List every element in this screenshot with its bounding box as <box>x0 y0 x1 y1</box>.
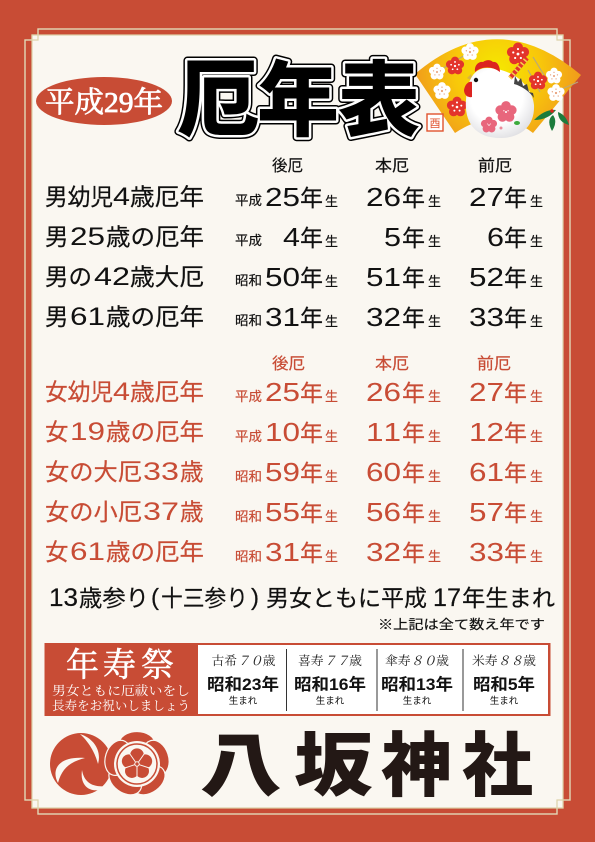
women: row 61 year olds: 生 <box>428 549 441 564</box>
women: row 33 year olds: 年 <box>402 460 425 486</box>
women: row 19 year olds: 年 <box>402 420 425 446</box>
women: row 37 year olds: 女の小厄 <box>45 499 142 525</box>
men: row 4 year olds: 平成 <box>235 193 262 208</box>
women: row 61 year olds: 年 <box>300 540 323 566</box>
thirteen year pilgrimage note: ) <box>251 584 259 610</box>
men: row 61 year olds <box>45 302 543 332</box>
thirteen year pilgrimage note: 十三参り <box>161 585 248 611</box>
women: row 61 year olds: 32 <box>366 537 401 567</box>
women: row 19 year olds: 歳の厄年 <box>106 419 204 445</box>
festival message <box>52 683 190 713</box>
shrine name: 神 <box>381 710 452 811</box>
men: row 61 year olds: 年 <box>300 305 323 331</box>
men: row 25 year olds: 生 <box>325 234 338 249</box>
title: 表 <box>338 34 420 153</box>
women: row 61 year olds: 31 <box>265 537 300 567</box>
men: row 61 year olds: 生 <box>428 314 441 329</box>
title: 年 <box>257 34 339 153</box>
men: column headings: 本厄 <box>375 157 409 175</box>
men: row 4 year olds: 年 <box>504 185 527 211</box>
women: row 19 year olds: 11 <box>366 417 401 447</box>
men: row 4 year olds: 27 <box>469 182 504 212</box>
men: row 4 year olds: 生 <box>428 194 441 209</box>
women: row 4 year olds: 女幼児 <box>45 379 113 405</box>
men: row 61 year olds: 年 <box>402 305 425 331</box>
men: row 25 year olds: 年 <box>300 225 323 251</box>
women: row 19 year olds: 年 <box>300 420 323 446</box>
women: row 33 year olds: 歳 <box>180 459 204 485</box>
festival message: 長寿をお祝いしましょう <box>52 698 190 713</box>
women: row 61 year olds: 生 <box>325 549 338 564</box>
women: row 33 year olds: 年 <box>300 460 323 486</box>
women: row 19 year olds: 年 <box>504 420 527 446</box>
men: row 4 year olds: 年 <box>402 185 425 211</box>
men: row 42 year olds: 生 <box>325 274 338 289</box>
women: row 19 year olds: 平成 <box>235 429 262 444</box>
women: row 33 year olds: 60 <box>366 457 401 487</box>
festival heading <box>66 647 174 684</box>
panel: longevity festival <box>44 643 550 716</box>
women: row 61 year olds: 61 <box>70 538 105 566</box>
festival heading: 年 <box>66 647 99 684</box>
plum blossoms <box>429 43 565 116</box>
women: row 61 year olds: 33 <box>469 537 504 567</box>
women: row 19 year olds: 生 <box>530 429 543 444</box>
women: row 19 year olds: 生 <box>325 429 338 444</box>
men: row 42 year olds <box>45 262 543 292</box>
women: row 4 year olds: 26 <box>366 377 401 407</box>
cell: kiju 77: 昭和16年 <box>294 674 366 694</box>
women: row 33 year olds: 生 <box>428 469 441 484</box>
women: row 4 year olds: 25 <box>265 377 300 407</box>
thirteen year pilgrimage note: 年生まれ <box>462 585 555 611</box>
women: row 37 year olds: 37 <box>143 498 179 526</box>
festival heading: 寿 <box>103 647 136 684</box>
men: row 4 year olds: 生 <box>325 194 338 209</box>
men: row 25 year olds: 生 <box>428 234 441 249</box>
men: row 25 year olds: 6 <box>487 222 504 252</box>
illustration: fan and rooster <box>415 39 581 138</box>
cell: koki 70: 昭和23年 <box>207 674 279 694</box>
women: row 33 year olds: 33 <box>143 458 179 486</box>
title: 表 <box>338 34 420 153</box>
women: row 4 year olds: 生 <box>325 389 338 404</box>
men: row 61 year olds: 生 <box>530 314 543 329</box>
men: row 61 year olds: 61 <box>70 303 105 331</box>
men: row 42 year olds: 52 <box>469 262 504 292</box>
year badge <box>36 77 172 125</box>
thirteen year pilgrimage note: 17 <box>433 584 461 612</box>
cell: kiju 77: 生まれ <box>316 695 345 707</box>
cell: beiju 88: 昭和5年 <box>473 674 535 694</box>
cell: beiju 88: 生まれ <box>490 695 519 707</box>
men: row 42 year olds: 51 <box>366 262 401 292</box>
cell: sanju 80 <box>381 653 453 707</box>
women: row 4 year olds: 4 <box>113 378 130 406</box>
men: row 25 year olds: 年 <box>402 225 425 251</box>
women: row 37 year olds: 55 <box>265 497 300 527</box>
cell dividers <box>286 649 463 711</box>
shrine name: 坂 <box>294 710 373 811</box>
men: row 42 year olds: 生 <box>530 274 543 289</box>
men: row 42 year olds: 42 <box>94 263 130 291</box>
women: row 33 year olds: 生 <box>530 469 543 484</box>
men: row 42 year olds: 歳大厄 <box>130 264 204 290</box>
men: row 61 year olds: 33 <box>469 302 504 332</box>
men: row 61 year olds: 男 <box>45 304 68 330</box>
women: row 33 year olds: 生 <box>325 469 338 484</box>
men: row 42 year olds: 年 <box>504 265 527 291</box>
women: column headings: 本厄 <box>375 355 409 373</box>
men: row 25 year olds: 男 <box>45 224 68 250</box>
women: row 33 year olds: 59 <box>265 457 300 487</box>
women: row 19 year olds: 10 <box>265 417 300 447</box>
cell: sanju 80: 昭和13年 <box>381 674 453 694</box>
cell: beiju 88 <box>472 653 536 707</box>
men: row 25 year olds: 平成 <box>235 233 262 248</box>
shrine name <box>200 710 533 811</box>
cell: kiju 77: 喜寿７７歳 <box>298 653 362 668</box>
men: row 61 year olds: 年 <box>504 305 527 331</box>
title <box>177 34 420 153</box>
thirteen year pilgrimage note: 歳参り <box>79 585 149 611</box>
thirteen year pilgrimage note <box>49 584 555 612</box>
women: row 37 year olds <box>45 497 543 527</box>
title: 年 <box>257 34 339 153</box>
thirteen year pilgrimage note: 男女ともに平成 <box>266 585 427 611</box>
men: row 61 year olds: 歳の厄年 <box>106 304 204 330</box>
women: row 61 year olds: 昭和 <box>235 549 262 564</box>
women: row 19 year olds: 12 <box>469 417 504 447</box>
men: row 42 year olds: 昭和 <box>235 273 262 288</box>
women: row 61 year olds <box>45 537 543 567</box>
women: row 61 year olds: 生 <box>530 549 543 564</box>
men: column headings: 前厄 <box>478 157 512 175</box>
men: row 42 year olds: 男の <box>45 264 92 290</box>
seal stamp: 酉 <box>430 118 440 130</box>
women: row 4 year olds: 年 <box>402 380 425 406</box>
women: row 33 year olds <box>45 457 543 487</box>
women: row 37 year olds: 56 <box>366 497 401 527</box>
women: row 4 year olds: 年 <box>300 380 323 406</box>
festival heading: 祭 <box>141 647 174 684</box>
thirteen year pilgrimage note: 13 <box>49 584 78 612</box>
thirteen year pilgrimage note: ( <box>151 584 159 610</box>
men: row 25 year olds: 年 <box>504 225 527 251</box>
rooster <box>464 58 534 138</box>
women: row 37 year olds: 生 <box>325 509 338 524</box>
women: row 19 year olds: 生 <box>428 429 441 444</box>
women: row 4 year olds: 年 <box>504 380 527 406</box>
men: column headings <box>272 157 512 175</box>
men: row 61 year olds: 昭和 <box>235 313 262 328</box>
women: row 37 year olds: 年 <box>504 500 527 526</box>
men: row 4 year olds: 25 <box>265 182 300 212</box>
counted age footnote: ※上記は全て数え年です <box>378 617 545 632</box>
title: 年 <box>257 34 339 153</box>
men: row 4 year olds: 4 <box>113 183 130 211</box>
women: column headings: 後厄 <box>272 355 305 373</box>
festival message: 男女ともに厄祓いをし <box>52 683 190 698</box>
women: row 37 year olds: 年 <box>300 500 323 526</box>
men: row 61 year olds: 生 <box>325 314 338 329</box>
women: row 19 year olds: 女 <box>45 419 68 445</box>
men: row 42 year olds: 年 <box>402 265 425 291</box>
shrine name: 社 <box>462 710 533 811</box>
title: 厄 <box>177 34 259 153</box>
men: row 4 year olds: 男幼児 <box>45 184 113 210</box>
blossom <box>122 748 152 778</box>
men: row 42 year olds: 年 <box>300 265 323 291</box>
cell: sanju 80: 傘寿８０歳 <box>385 653 449 668</box>
women: row 4 year olds: 生 <box>428 389 441 404</box>
seal stamp <box>427 114 443 131</box>
women: row 61 year olds: 歳の厄年 <box>106 539 204 565</box>
women: row 37 year olds: 年 <box>402 500 425 526</box>
cell: beiju 88: 米寿８８歳 <box>472 653 536 668</box>
icon: mokko crest <box>101 732 173 801</box>
title: 表 <box>338 34 420 153</box>
men: row 61 year olds: 31 <box>265 302 300 332</box>
women: row 4 year olds: 平成 <box>235 389 262 404</box>
men: row 25 year olds: 25 <box>70 223 105 251</box>
women: row 33 year olds: 61 <box>469 457 504 487</box>
women: row 61 year olds: 女 <box>45 539 68 565</box>
twigs <box>437 52 578 92</box>
folding fan <box>415 39 581 133</box>
title: 厄 <box>177 34 259 153</box>
year badge: 平成29年 <box>45 86 163 119</box>
cell: koki 70: 生まれ <box>229 695 258 707</box>
bamboo leaves <box>534 109 569 131</box>
men: row 4 year olds: 生 <box>530 194 543 209</box>
women: row 33 year olds: 年 <box>504 460 527 486</box>
men: row 4 year olds: 年 <box>300 185 323 211</box>
women: row 33 year olds: 女の大厄 <box>45 459 142 485</box>
women: row 19 year olds: 19 <box>70 418 105 446</box>
women: row 4 year olds <box>45 377 543 407</box>
men: row 25 year olds <box>45 222 543 252</box>
men: row 42 year olds: 生 <box>428 274 441 289</box>
women: column headings: 前厄 <box>477 355 511 373</box>
women: row 61 year olds: 年 <box>402 540 425 566</box>
women: row 37 year olds: 57 <box>469 497 504 527</box>
cell: koki 70: 古希７０歳 <box>212 653 276 668</box>
men: row 25 year olds: 4 <box>283 222 300 252</box>
women: row 33 year olds: 昭和 <box>235 469 262 484</box>
women: row 4 year olds: 歳厄年 <box>130 379 204 405</box>
women: row 37 year olds: 生 <box>428 509 441 524</box>
shrine name: 八 <box>200 710 282 811</box>
women: row 4 year olds: 27 <box>469 377 504 407</box>
men: row 4 year olds: 歳厄年 <box>130 184 204 210</box>
men: row 25 year olds: 生 <box>530 234 543 249</box>
cell: kiju 77 <box>294 653 366 707</box>
women: row 61 year olds: 年 <box>504 540 527 566</box>
men: row 25 year olds: 歳の厄年 <box>106 224 204 250</box>
men: column headings: 後厄 <box>272 157 303 175</box>
men: row 42 year olds: 50 <box>265 262 300 292</box>
men: row 4 year olds: 26 <box>366 182 401 212</box>
cell: sanju 80: 生まれ <box>403 695 432 707</box>
women: row 37 year olds: 歳 <box>180 499 204 525</box>
women: row 4 year olds: 生 <box>530 389 543 404</box>
men: row 61 year olds: 32 <box>366 302 401 332</box>
men: row 4 year olds <box>45 182 543 212</box>
women: row 37 year olds: 昭和 <box>235 509 262 524</box>
cell: koki 70 <box>207 653 279 707</box>
women: column headings <box>272 355 511 373</box>
men: row 25 year olds: 5 <box>384 222 401 252</box>
title: 厄 <box>177 34 259 153</box>
outer lobes <box>101 732 173 801</box>
women: row 37 year olds: 生 <box>530 509 543 524</box>
icon: mitsudomoe crest <box>50 733 112 795</box>
women: row 19 year olds <box>45 417 543 447</box>
